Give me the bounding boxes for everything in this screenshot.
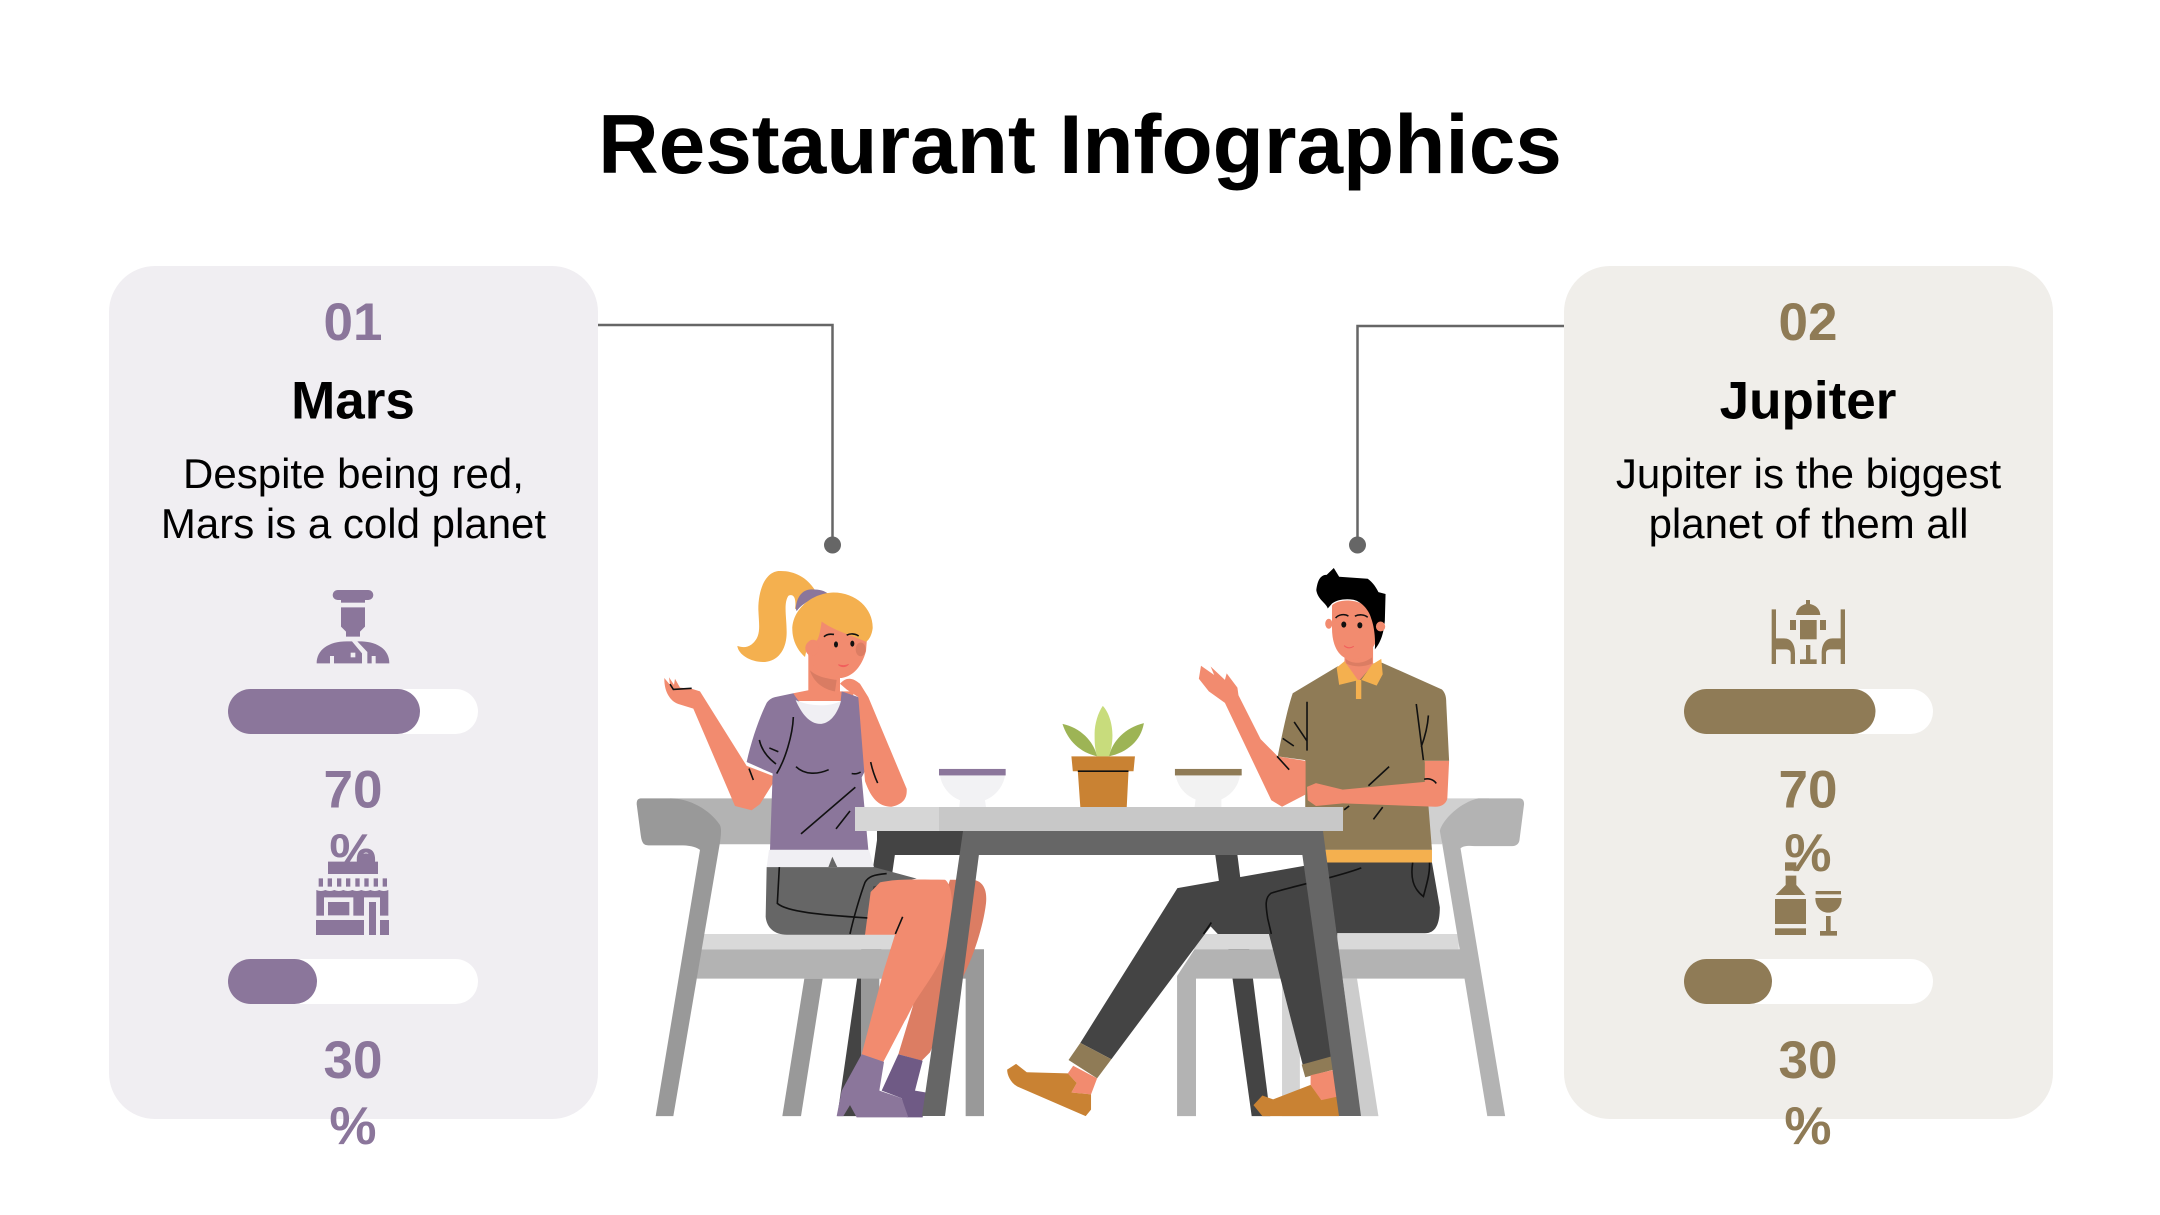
icon: wine bottle and glass: [1775, 862, 1842, 936]
collar: [1337, 661, 1358, 685]
near boot: [837, 1054, 908, 1117]
far leg: [898, 880, 986, 1061]
face: [808, 621, 868, 678]
text block: Jupiter description: Jupiter is the biggest: [1616, 450, 2001, 497]
panel: Mars: [109, 266, 598, 1156]
left arm: [664, 677, 777, 810]
icon: dining table: [1772, 600, 1845, 664]
raised arm: [1199, 666, 1306, 807]
shirt folds: [1277, 702, 1436, 819]
value: 30%: %: [329, 1097, 377, 1156]
icon: chef: [317, 590, 389, 663]
value: 30%: 30: [324, 1031, 382, 1090]
value: 30%: 30: [1779, 1031, 1837, 1090]
near leg and hips: [1080, 863, 1440, 1059]
table: far legs: [837, 831, 1270, 1116]
near leg: [862, 880, 952, 1062]
progress bar: Jupiter 70: [1684, 689, 1933, 734]
progress bar: Mars 70: [228, 689, 478, 734]
text block: Mars description: Despite being red,: [183, 450, 524, 497]
connector: Mars to woman: [598, 325, 841, 554]
trouser folds: [1203, 863, 1430, 934]
far boot: [882, 1054, 926, 1117]
ponytail: [737, 571, 815, 662]
far leg: [1266, 922, 1337, 1068]
hair: [1316, 568, 1386, 649]
text block: Jupiter description: planet of them all: [1649, 500, 1968, 547]
figure: man: [1007, 568, 1449, 1116]
icon: restaurant building: [316, 853, 389, 935]
value: 70%: %: [1784, 824, 1832, 883]
table: [855, 807, 1361, 1116]
connector: Jupiter to man: [1349, 326, 1564, 554]
number 01: 01: [324, 293, 382, 352]
plant: [1062, 706, 1144, 807]
right arm: [840, 679, 907, 807]
value: 30%: %: [1784, 1097, 1832, 1156]
bowl: brown: [1175, 769, 1242, 807]
hair band: [796, 589, 828, 611]
chair: left: [637, 798, 984, 1116]
hair: [792, 592, 873, 657]
value: 70%: %: [329, 824, 377, 883]
shirt: [747, 691, 871, 850]
near cuff and foot: [1069, 1043, 1111, 1078]
panel: Jupiter: [1564, 266, 2053, 1156]
progress bar: Mars 30: [228, 959, 478, 1004]
heading: Mars: Mars: [291, 372, 415, 430]
shirt: [1278, 663, 1449, 850]
value: 70%: 70: [324, 760, 382, 820]
eyes and brows: [834, 641, 838, 647]
heading: Jupiter: Jupiter: [1720, 372, 1896, 430]
shirt folds: [749, 717, 878, 834]
shorts folds: [777, 867, 903, 934]
eyes and brows: [1341, 621, 1346, 628]
shirt hem: [767, 850, 874, 867]
neck: [793, 651, 853, 701]
neck and face: [1345, 647, 1373, 682]
shorts: [766, 867, 917, 935]
bowl: purple: [939, 769, 1006, 807]
progress bar: Jupiter 30: [1684, 959, 1933, 1004]
title: Restaurant Infographics: [598, 97, 1562, 191]
crossed arm: [1307, 761, 1449, 807]
illustration: restaurant scene: [637, 568, 1524, 1117]
gap between legs: [879, 1005, 913, 1091]
value: 70%: 70: [1779, 760, 1837, 820]
number 02: 02: [1779, 293, 1837, 352]
chair: right: [1177, 798, 1524, 1116]
figure: woman: [664, 571, 986, 1117]
text block: Mars description: Mars is a cold planet: [161, 500, 546, 547]
